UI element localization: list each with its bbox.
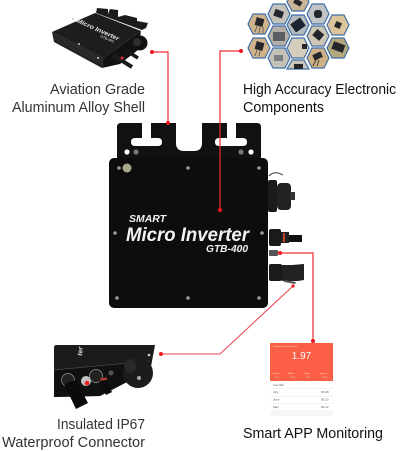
- label: high accuracy components: Components: [243, 100, 324, 116]
- header stats: 89.3: [291, 377, 296, 379]
- icon: small aluminum shell inverter photo: GTB-400: [100, 34, 114, 44]
- connectors: [62, 370, 112, 409]
- arrow: components leader line: [218, 49, 243, 212]
- icon: waterproof connector close-up photo: ter: [77, 345, 85, 356]
- mounting bracket: [117, 123, 261, 158]
- header stats: [273, 372, 328, 379]
- label: aviation grade shell: Aviation Grade: [50, 82, 145, 98]
- icon: small aluminum shell inverter photo: [52, 8, 148, 68]
- upper DC connector: [269, 229, 302, 246]
- product name: GTB-400: [206, 244, 248, 255]
- header stats: 0.00: [275, 377, 280, 379]
- header stats: Current: [273, 372, 280, 375]
- label: insulated connector: Waterproof Connector: [2, 435, 145, 451]
- bracket holes: [124, 149, 254, 155]
- label: aviation grade shell: Aluminum Alloy Shell: [12, 100, 145, 116]
- arrow: shell leader line: [150, 50, 170, 125]
- icon: smart app screenshot: June: [273, 398, 280, 402]
- label: high accuracy components: High Accuracy Electronic: [243, 82, 396, 98]
- vent valve: [269, 250, 278, 256]
- arrow: connector leader line: [159, 284, 295, 356]
- product name: SMART: [129, 213, 168, 225]
- header stats: 52.50: [322, 377, 328, 379]
- label: smart app monitoring: Smart APP Monitoring: [243, 426, 383, 442]
- header stats: Income: [320, 373, 327, 375]
- income value: 1.97: [292, 351, 312, 362]
- header stats: 20.4: [306, 377, 311, 379]
- arrow: app monitoring leader line: [278, 251, 315, 343]
- body screws: [113, 164, 264, 300]
- waterproof cap connector: [268, 173, 295, 212]
- icon: smart app screenshot: Total lifetime income (USD): [273, 345, 298, 348]
- icon: smart app screenshot: May: [273, 405, 279, 409]
- label: insulated connector: [2, 417, 145, 451]
- icon: smart app screenshot: Year 2024: [273, 384, 284, 387]
- label: high accuracy components: [243, 82, 396, 116]
- icon: smart app screenshot: 60.12: [321, 405, 329, 409]
- inverter body: [109, 158, 268, 308]
- icon: smart app screenshot: [270, 343, 333, 416]
- vent and red dot: [81, 376, 91, 386]
- icon: electronic components hexagon cluster: [248, 0, 349, 69]
- icon: waterproof connector close-up photo: [54, 345, 155, 409]
- monthly list: [270, 381, 333, 410]
- product name: Micro Inverter: [126, 225, 251, 246]
- app header: [270, 343, 333, 381]
- icon: smart app screenshot: 50.20: [321, 398, 329, 402]
- round cap: [108, 358, 153, 388]
- label: insulated connector: Insulated IP67: [57, 417, 145, 433]
- header stats: Today: [304, 373, 309, 375]
- icon: smart app screenshot: July: [273, 390, 279, 394]
- header stats: Month: [288, 372, 294, 375]
- icon: small aluminum shell inverter photo: Micro Inverter: [75, 17, 121, 43]
- main inverter device: [109, 123, 304, 308]
- icon: smart app screenshot: 36.00: [321, 390, 329, 394]
- lower DC connector: [269, 264, 304, 284]
- product name: [126, 213, 251, 255]
- label: aviation grade shell: [12, 82, 145, 116]
